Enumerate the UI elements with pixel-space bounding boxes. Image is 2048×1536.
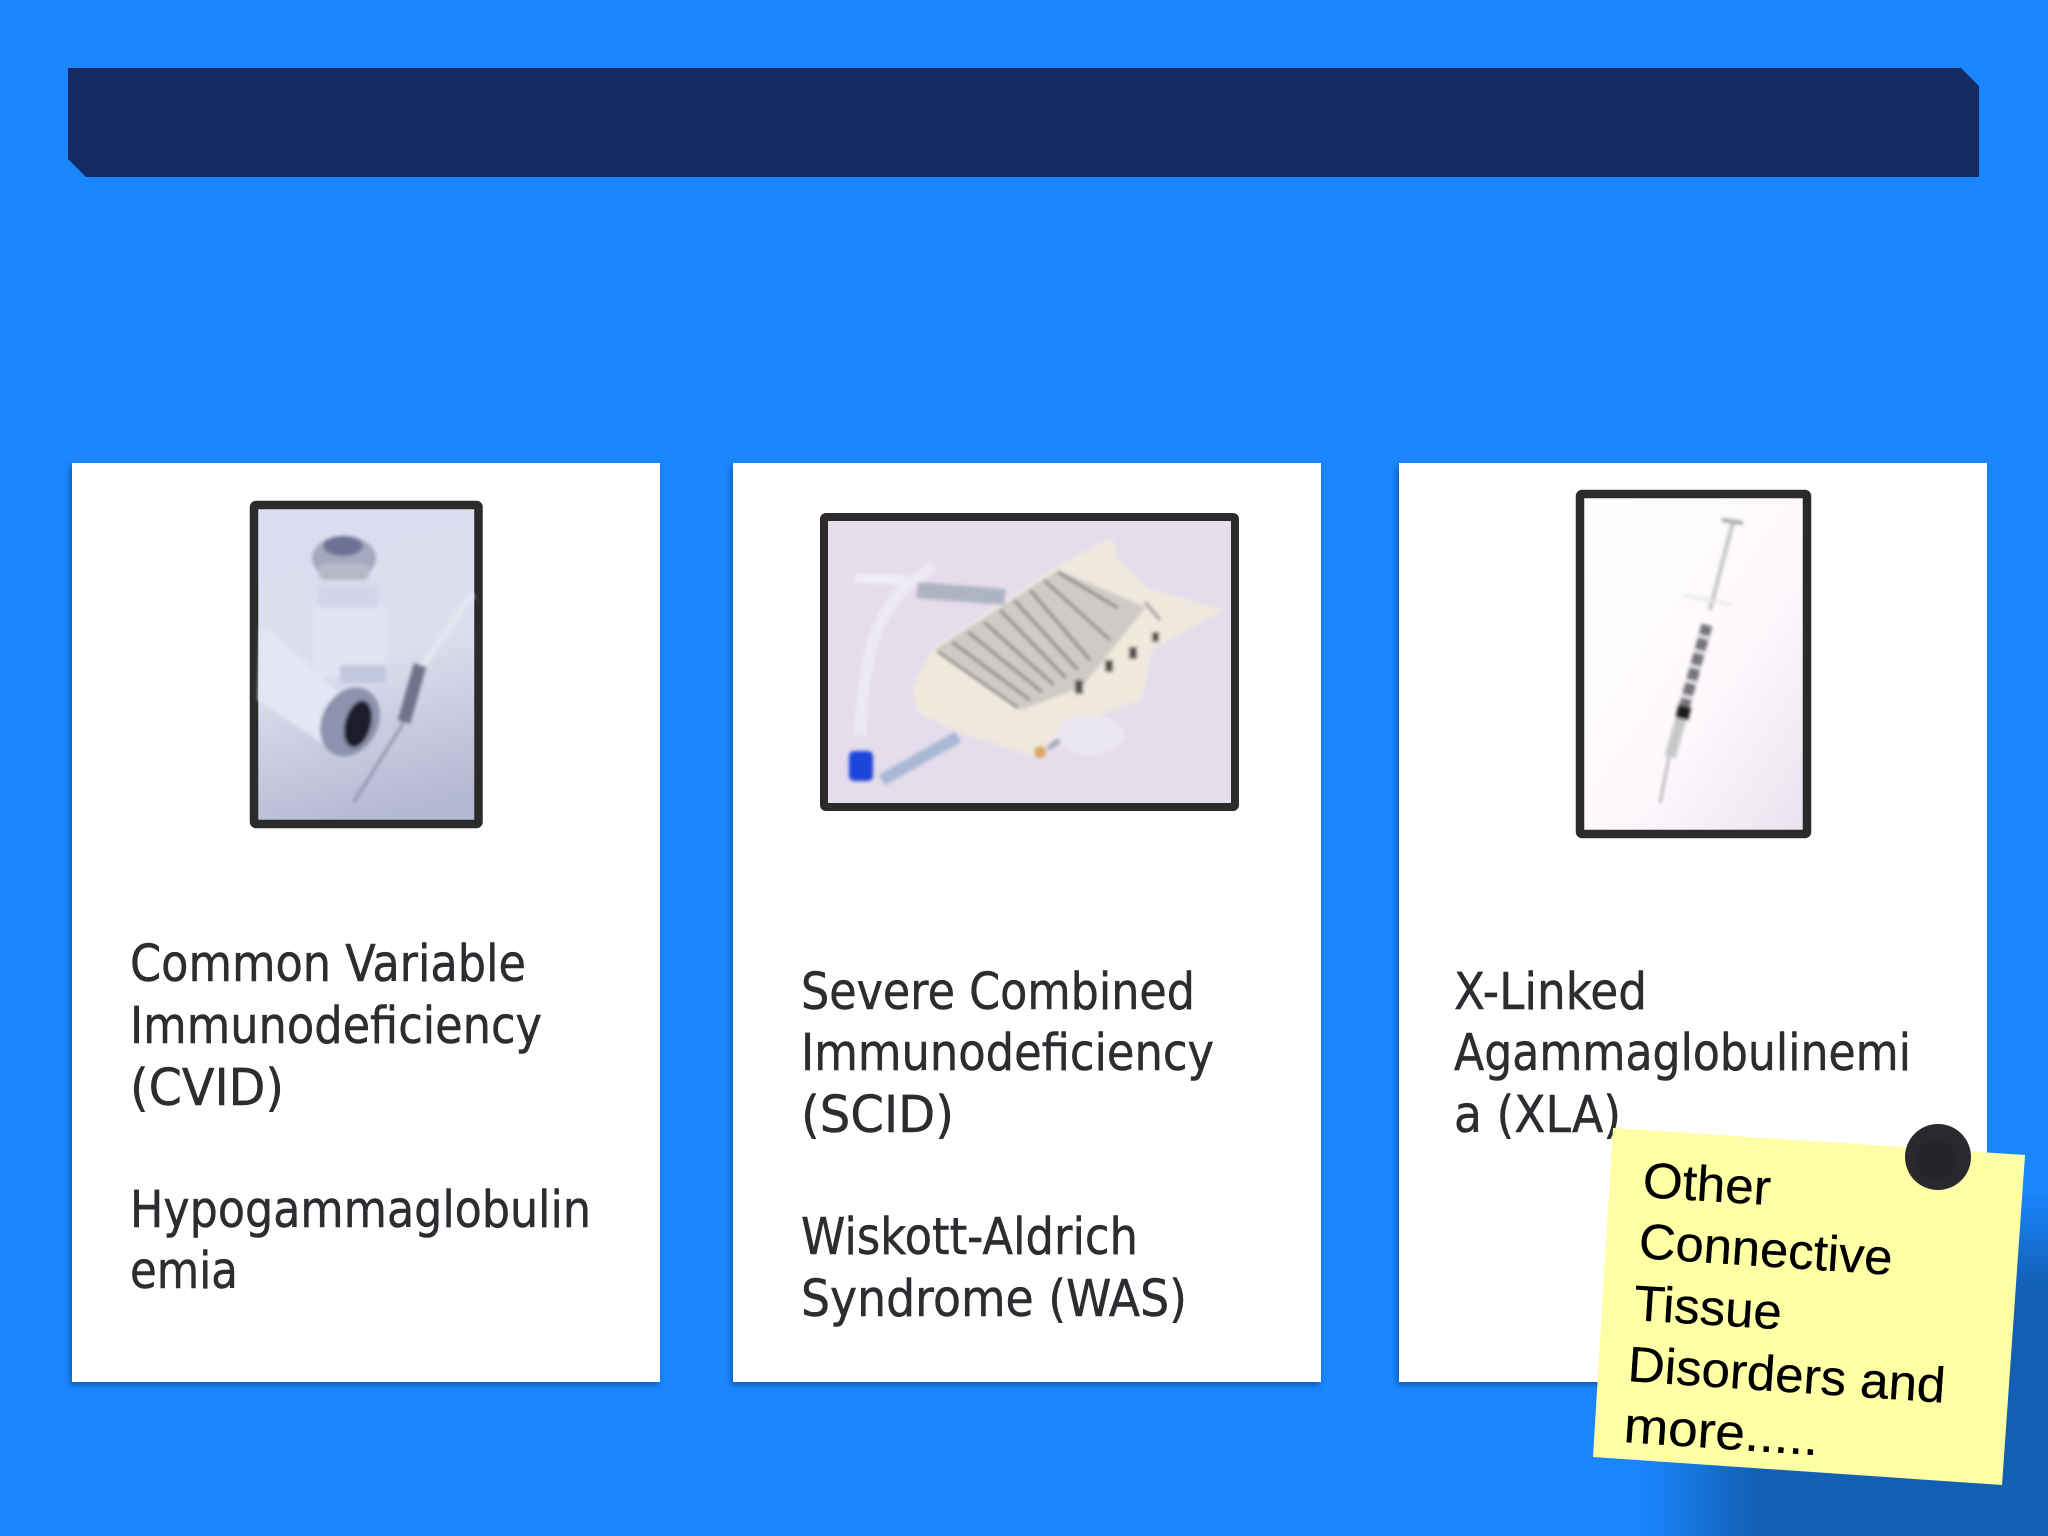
sticky note: Other [1641,1152,1773,1216]
sticky note: Connective [1637,1213,1894,1286]
panel: XLA [1399,463,1987,1382]
text: SCID: (SCID) [801,1086,954,1145]
text: CVID: Hypogammaglobulin [130,1181,591,1240]
text: SCID: Severe Combined [801,963,1195,1022]
photo: vials and syringe [254,505,478,824]
text: XLA: Agammaglobulinemi [1454,1024,1911,1083]
sticky note [1593,1128,2025,1485]
text: SCID [801,963,1214,1329]
text: CVID: Common Variable [130,935,526,994]
sticky note shadow [1640,1190,2048,1536]
text: CVID: (CVID) [130,1059,284,1118]
photo: infusion bag [824,517,1235,807]
sticky note: Disorders and [1626,1336,1947,1414]
photo: syringe [1580,494,1807,834]
text: CVID: emia [130,1242,238,1301]
title banner [68,68,1979,177]
sticky note: more..... [1622,1397,1821,1466]
text: SCID: Immunodeficiency [801,1024,1214,1083]
text: CVID [130,935,591,1301]
text: XLA: a (XLA) [1454,1086,1621,1145]
text: SCID: Wiskott-Aldrich [801,1208,1138,1267]
sticky note: Tissue [1632,1275,1784,1340]
panel: CVID [72,463,660,1382]
panel: SCID [733,463,1321,1382]
text: CVID: Immunodeficiency [130,997,542,1056]
text: SCID: Syndrome (WAS) [801,1270,1187,1329]
text: XLA [1454,963,1911,1145]
text: XLA: X-Linked [1454,963,1647,1022]
icon: push pin [1905,1124,1971,1190]
